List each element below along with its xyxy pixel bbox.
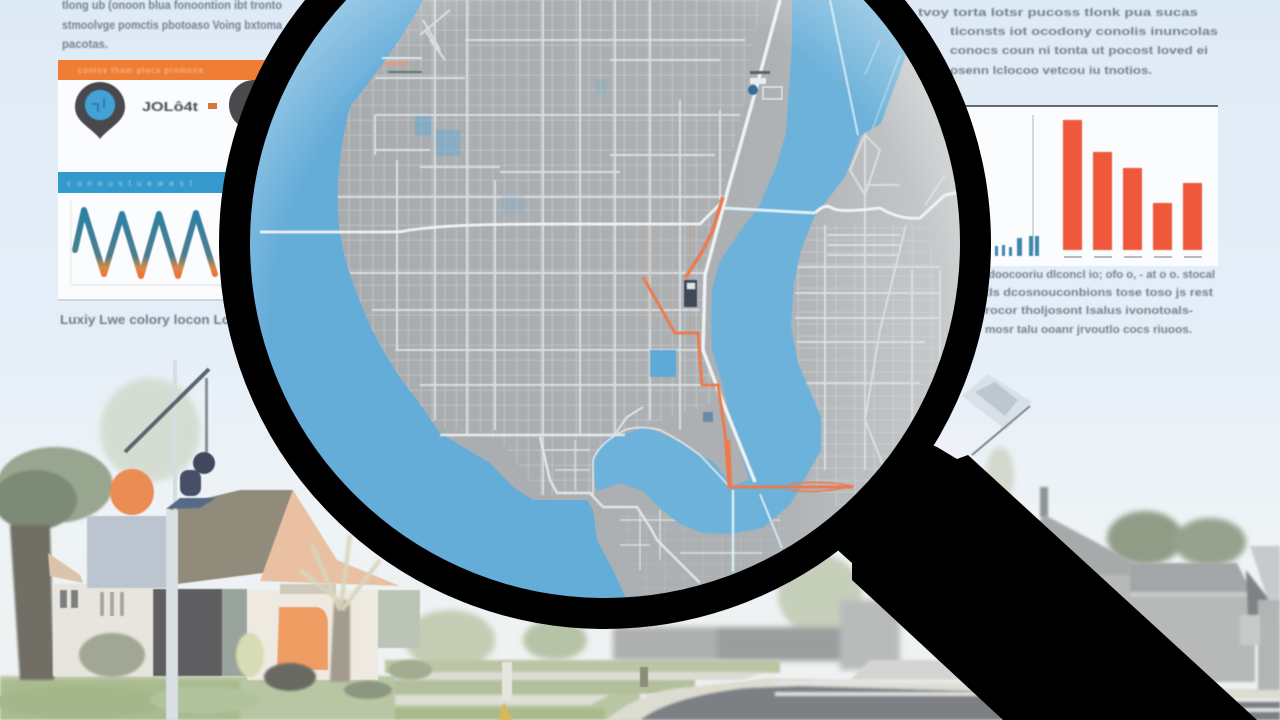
garden shrubs — [0, 633, 432, 718]
orange header bar — [58, 60, 288, 80]
house: right — [1000, 487, 1280, 690]
map inside lens — [240, 0, 970, 610]
orange header bar: conlos tham plocs promona — [78, 66, 204, 75]
street grid south — [626, 516, 780, 589]
lawn and pavement — [0, 660, 1280, 720]
tree: left — [0, 378, 200, 680]
text block: top left paragraph: stmoolvge pomctis pbotoaso Voing bxtoma — [62, 18, 282, 32]
small blue bars — [995, 236, 1039, 256]
text block: top right paragraph: tvoy torta lotsr pucoss tlonk pua sucas — [918, 7, 1198, 19]
lens rim — [234, 0, 976, 614]
chart: wave line — [70, 200, 225, 285]
background trees and walls — [405, 447, 1246, 670]
text block: lower right paragraph — [985, 269, 1215, 336]
marker: route pin — [684, 280, 697, 307]
blue header bar — [58, 172, 226, 193]
orange globe — [110, 469, 154, 515]
stat label: JOLô4t — [142, 99, 199, 114]
tree: centre — [300, 535, 380, 682]
text block: lower right paragraph: ldoocooriu dlconcl io; ofo o, - at o o. stocal — [985, 269, 1215, 281]
street lamp pole and sign — [87, 360, 216, 720]
orange door — [277, 607, 328, 670]
text block: lower right paragraph: rocor tholjosont lsalus ivonotoals- — [985, 305, 1193, 317]
panel shadow line — [58, 299, 238, 301]
text block: lower right paragraph: tls dcosnouconbions tose toso js rest — [985, 287, 1213, 299]
text block: top left paragraph — [62, 0, 282, 51]
text block: top left paragraph: pacotas. — [62, 37, 108, 51]
text block: lower right paragraph: mosr talu ooanr jrvoutlo cocs riuoos. — [985, 324, 1192, 336]
river and bay — [593, 0, 905, 533]
street grid east — [796, 226, 932, 506]
handle — [832, 440, 1257, 720]
panel: left dashboard — [58, 60, 265, 299]
ponds — [415, 80, 713, 422]
text block: left caption: Luxiy Lwe colory locon Lo — [60, 313, 230, 327]
text block: top right paragraph: ticonsts iot ocodony conolis inuncolas — [950, 26, 1218, 38]
road — [606, 678, 1280, 720]
scene: neighbourhood street — [0, 360, 1280, 720]
text block: top right paragraph: osenn lclocoo vetcou iu tnotios. — [950, 65, 1152, 77]
magnifying glass — [234, 0, 1257, 720]
route: orange highlighted path — [643, 197, 853, 491]
left water — [250, 0, 626, 598]
lens sheen — [250, 0, 957, 311]
icon: map pin — [75, 82, 125, 139]
house: left — [48, 490, 420, 680]
grey sign panel — [87, 516, 166, 588]
text block: top right paragraph — [918, 7, 1218, 77]
text block: top right paragraph: conocs coun ni tonta ut pocost loved ei — [950, 45, 1208, 57]
orange marker — [208, 103, 217, 109]
blue header bar: conoustuewest — [67, 179, 193, 188]
bars — [1063, 120, 1202, 250]
land mass with streets — [338, 0, 960, 598]
bar labels — [1064, 256, 1202, 258]
panel: right bar chart — [960, 105, 1218, 266]
icon: second map pin — [229, 80, 256, 124]
axis line — [1032, 115, 1034, 251]
street grid west — [330, 0, 781, 495]
secondary streets — [335, 0, 945, 570]
marker: west pin — [382, 57, 422, 73]
sign behind lens — [935, 374, 1032, 460]
roadside marker — [498, 662, 648, 720]
main roads — [260, 0, 960, 583]
marker: north pin — [748, 71, 782, 99]
